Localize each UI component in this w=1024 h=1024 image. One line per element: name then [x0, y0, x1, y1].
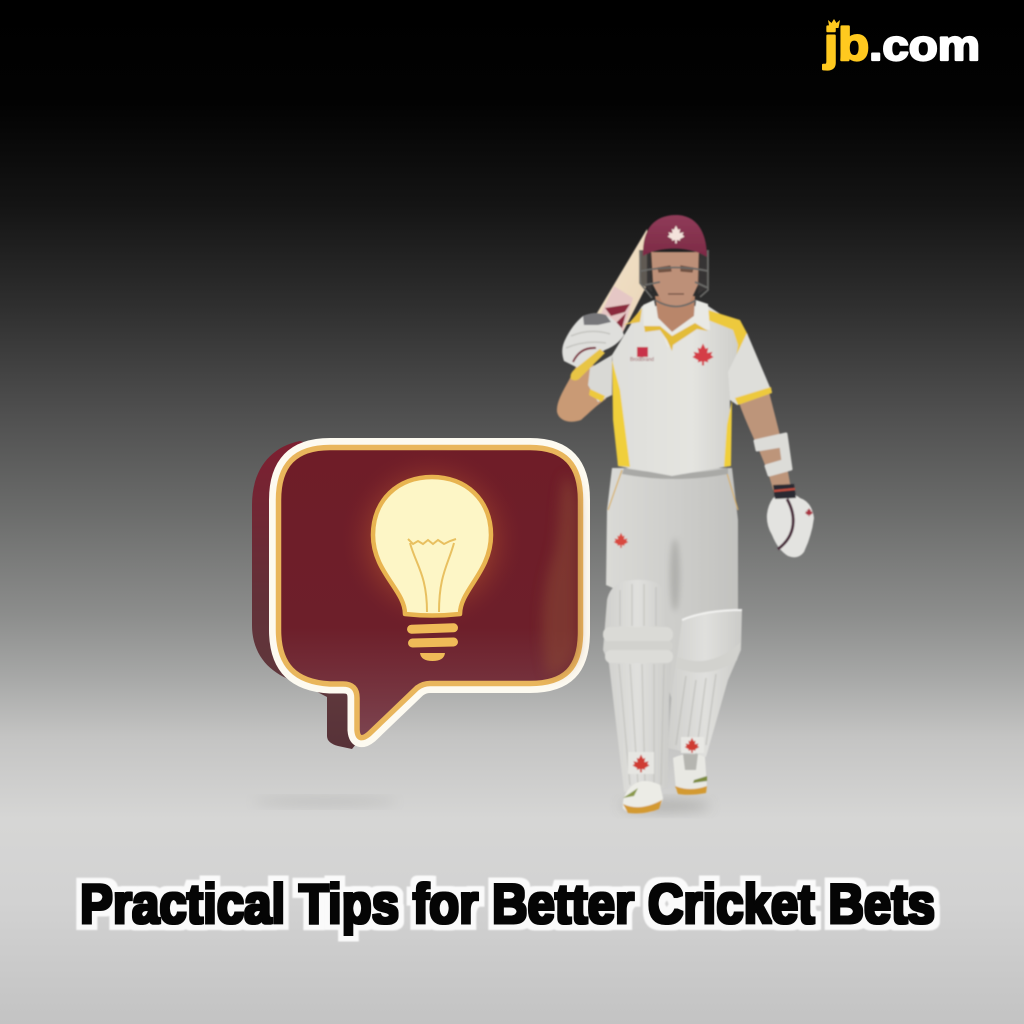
neck	[655, 296, 695, 332]
cricket player	[557, 215, 814, 814]
arm guard	[755, 434, 791, 475]
left batting glove on bat handle	[562, 313, 624, 368]
left sleeve	[588, 355, 612, 402]
right leg pad	[668, 610, 742, 757]
filament	[408, 539, 456, 612]
logo wordmark: jb.com	[823, 18, 980, 70]
helmet maple leaf	[668, 226, 684, 243]
right shoulder yoke	[708, 310, 748, 400]
helmet side flaps	[639, 250, 709, 294]
sponsor badge: BrodBrand	[630, 357, 654, 363]
bulb glass	[373, 477, 491, 616]
title: Practical Tips for Better Cricket Bets	[80, 872, 935, 935]
glossy reflection on right of bubble	[542, 474, 578, 676]
shirt	[588, 296, 772, 476]
trousers	[606, 468, 738, 700]
left shoe	[623, 781, 663, 814]
bubble 3D side	[252, 441, 400, 749]
eye and mouth shading	[658, 266, 693, 294]
player ground shadow	[620, 800, 710, 812]
right sleeve	[728, 333, 772, 405]
head and neck	[639, 215, 709, 307]
icon: crown	[828, 19, 840, 28]
chest maple leaf	[692, 344, 714, 366]
left shoulder yoke	[623, 308, 642, 325]
cricket bat	[597, 229, 647, 332]
trouser details	[608, 468, 738, 611]
bat handle	[570, 349, 605, 380]
bulb glow	[340, 448, 524, 632]
left pad ankle flag	[628, 752, 654, 774]
right batting glove	[767, 484, 814, 557]
yellow side panels	[612, 360, 732, 467]
right shoe	[673, 754, 707, 795]
helmet grille	[640, 250, 708, 306]
bat blade	[597, 229, 647, 332]
shirt body	[612, 306, 745, 476]
logo: jb.com	[823, 18, 980, 70]
right pad ankle flag	[681, 737, 704, 753]
left leg pad	[603, 580, 673, 792]
face	[651, 252, 699, 307]
sponsor badge	[630, 347, 654, 363]
bulb base threads	[407, 623, 458, 661]
helmet	[643, 215, 707, 257]
speech bubble with light bulb	[252, 441, 580, 749]
collar	[643, 300, 710, 348]
bat sticker	[600, 286, 633, 332]
bubble front with white and gold border	[278, 448, 580, 738]
left upper arm and forearm	[557, 362, 606, 422]
right arm	[738, 388, 791, 490]
icon: light bulb	[373, 477, 491, 661]
shadow under speech bubble	[253, 798, 397, 806]
